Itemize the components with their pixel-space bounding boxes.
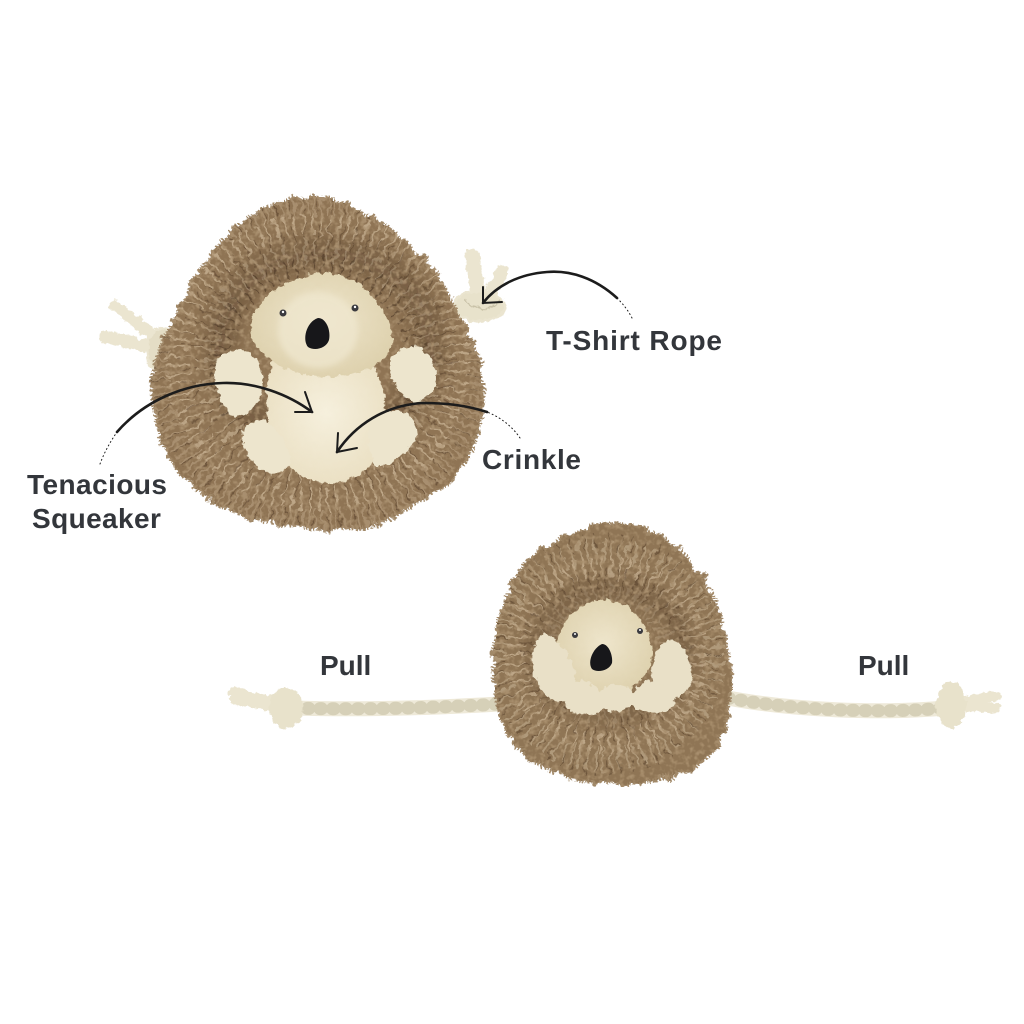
head <box>556 600 652 695</box>
nose and eyes <box>280 304 358 349</box>
label: pull left: Pull <box>320 650 371 681</box>
large hedgehog toy <box>106 197 505 529</box>
paws <box>214 347 436 473</box>
label: pull right: Pull <box>858 650 909 681</box>
label: crinkle: Crinkle <box>482 444 581 475</box>
arrow: tenacious squeaker <box>100 383 312 464</box>
small hedgehog toy with long rope <box>234 524 996 784</box>
long rope right <box>728 682 996 728</box>
body fur <box>153 197 483 529</box>
paws <box>532 633 692 716</box>
arrow: t-shirt rope <box>483 272 632 318</box>
left rope knot <box>106 306 177 372</box>
muzzle highlight <box>278 292 358 368</box>
label: t-shirt rope: T-Shirt Rope <box>546 325 722 356</box>
label: tenacious squeaker: Squeaker <box>32 503 161 534</box>
long rope left <box>234 688 500 728</box>
label: tenacious squeaker: Tenacious <box>27 469 167 500</box>
nose and eyes <box>572 628 643 671</box>
body and belly <box>267 355 386 483</box>
right rope knot <box>453 256 505 321</box>
head <box>251 273 393 377</box>
arrow: crinkle <box>337 403 520 452</box>
body fur <box>493 524 731 784</box>
